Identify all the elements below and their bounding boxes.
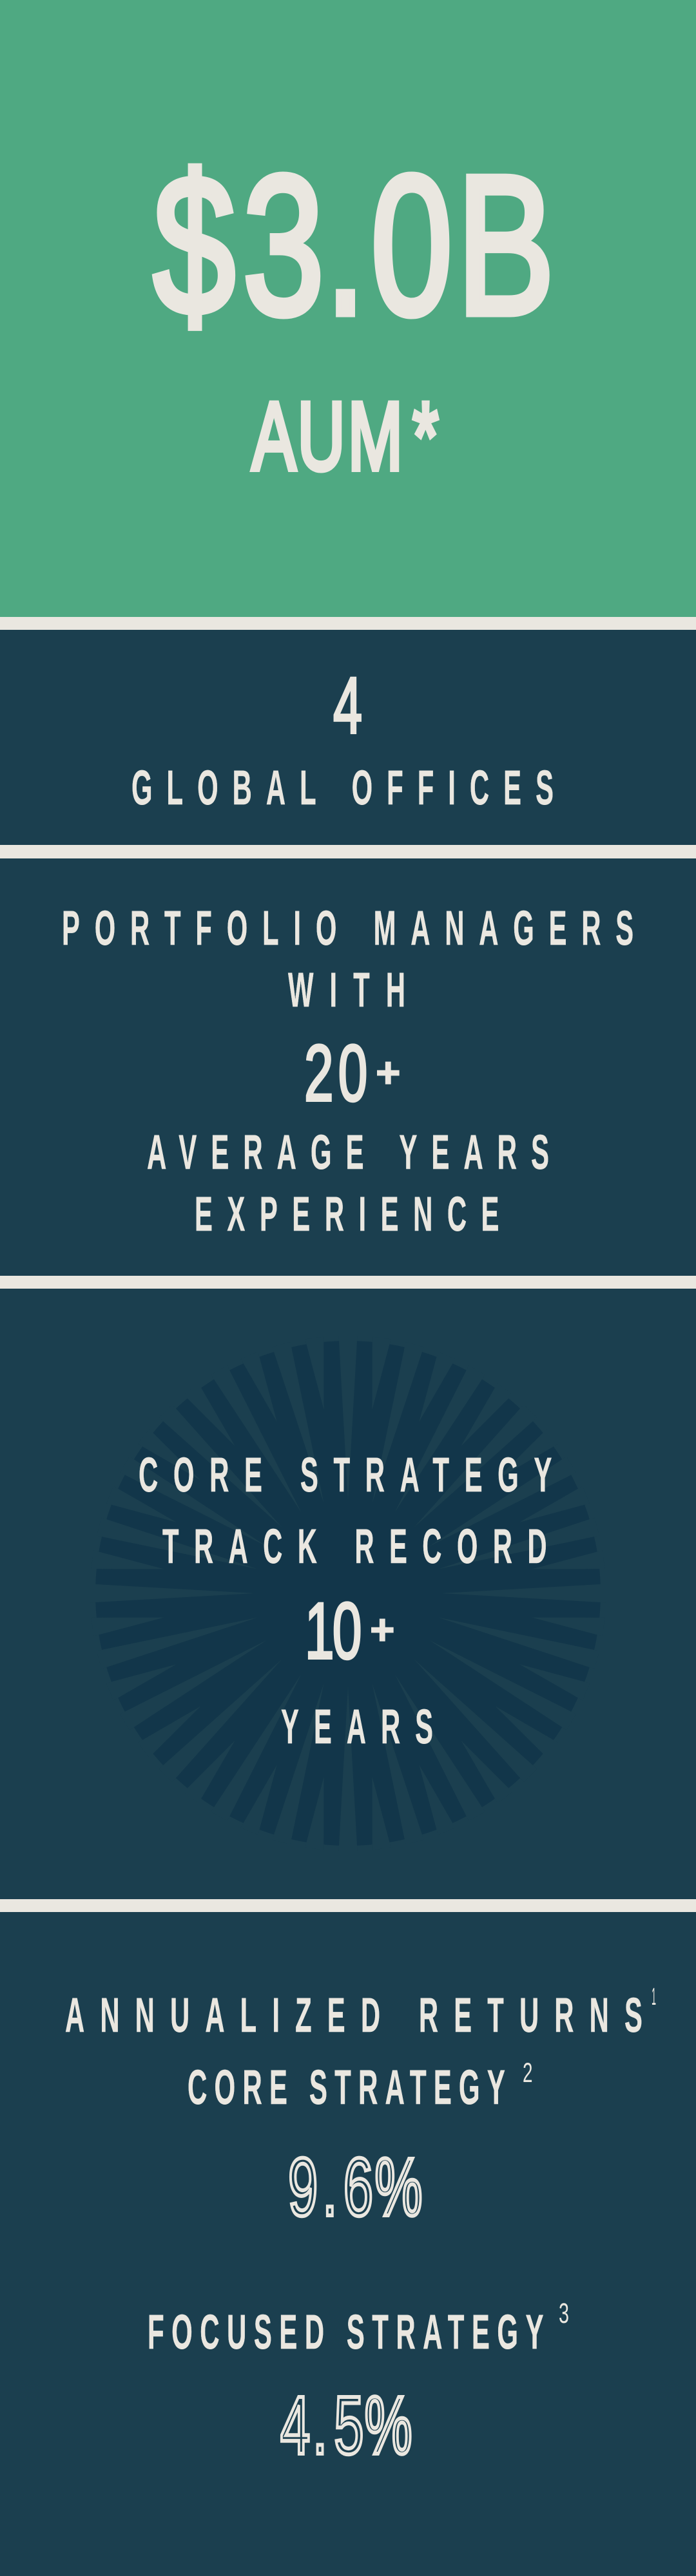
number: 10+: 10	[305, 1587, 362, 1676]
icon: sunburst rays	[90, 1336, 606, 1851]
number: 10+	[305, 1587, 395, 1676]
panel: assets under management	[0, 0, 696, 617]
number: 20+: 20	[304, 1029, 367, 1118]
footnote marker 2: 2	[523, 2058, 532, 2088]
heading: with: WITH	[288, 963, 421, 1018]
number: 20+: +	[376, 1048, 401, 1096]
number: 20+	[304, 1029, 401, 1118]
panel: global offices	[0, 630, 696, 845]
number: 4: 4	[333, 661, 362, 750]
panel: portfolio managers experience	[0, 858, 696, 1276]
label: years: YEARS	[281, 1700, 448, 1754]
panel: annualized returns: 1	[652, 1984, 656, 2011]
value: 9.6%: 9.6%	[288, 2141, 423, 2233]
big number: $3.0B: $3.0B	[153, 135, 555, 356]
number: 10+: +	[370, 1605, 395, 1653]
panel: core strategy track record	[0, 1289, 696, 1899]
panel: annualized returns	[0, 1912, 696, 2576]
label: AUM*: AUM*	[252, 382, 438, 490]
footnote marker 3: 3	[559, 2298, 569, 2329]
value: 4.5%: 4.5%	[280, 2380, 412, 2472]
